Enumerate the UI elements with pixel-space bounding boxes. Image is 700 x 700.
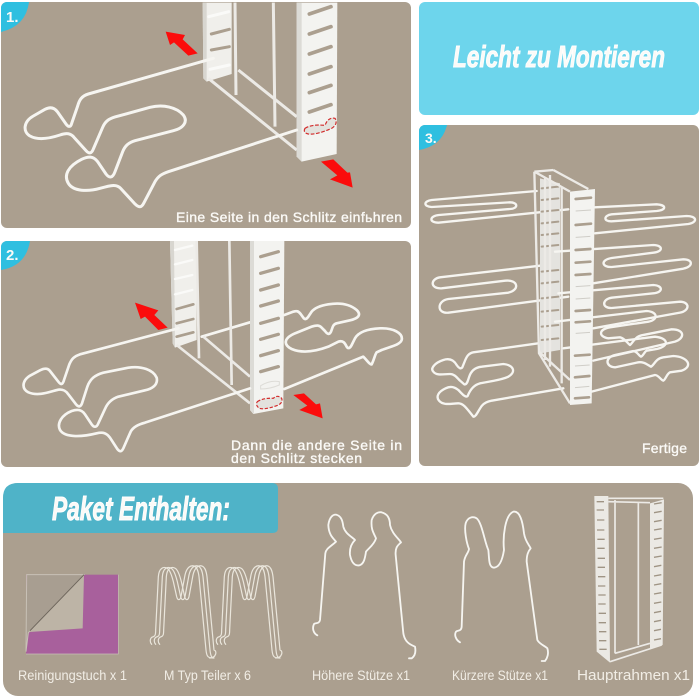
label: M dividers: M Typ Teiler x 6 bbox=[164, 668, 251, 683]
panel: step 2 bbox=[1, 241, 411, 467]
caption: step 3: Fertige bbox=[642, 440, 687, 456]
caption: step 1: Eine Seite in den Schlitz einfьhren bbox=[176, 209, 402, 225]
badge: step 2 bbox=[1, 241, 30, 270]
badge: step 1: 1. bbox=[6, 9, 19, 26]
caption: step 2 bbox=[231, 440, 402, 464]
panel: step 1 bbox=[1, 2, 411, 228]
icon: shorter support bbox=[455, 512, 548, 661]
label: main frame: Hauptrahmen x1 bbox=[577, 668, 690, 684]
icon: taller support bbox=[313, 512, 415, 658]
icon: left wires bbox=[425, 191, 568, 417]
heading banner: Paket Enthalten: bbox=[52, 490, 230, 527]
icon: wire divider step 1 bbox=[25, 58, 297, 207]
icon: cleaning cloth bbox=[26, 575, 118, 654]
arrow: red left bbox=[135, 303, 168, 330]
caption: step 2: den Schlitz stecken bbox=[231, 450, 362, 466]
badge: step 1 bbox=[1, 2, 29, 32]
icon: front post bbox=[570, 189, 595, 405]
arrow: red right bbox=[293, 393, 323, 418]
label: shorter support: Kürzere Stütze x1 bbox=[452, 668, 548, 683]
arrow: red right bbox=[321, 159, 353, 188]
panel: package contents bbox=[3, 483, 693, 696]
icon: right wires bbox=[555, 204, 695, 392]
icon: rack frame step 2 bbox=[170, 241, 284, 414]
panel: title banner bbox=[419, 2, 699, 115]
icon: main frame bbox=[594, 496, 664, 663]
label: taller support: Höhere Stütze x1 bbox=[312, 668, 410, 683]
badge: step 3 bbox=[419, 125, 447, 150]
icon: wire divider step 2 bbox=[24, 328, 250, 451]
caption: step 2: Dann die andere Seite in bbox=[231, 437, 402, 453]
icon: rack frame step 1 bbox=[203, 3, 337, 162]
arrow: red left bbox=[166, 32, 198, 56]
heading banner bbox=[3, 483, 278, 533]
label: cloth: Reinigungstuch x 1 bbox=[18, 668, 127, 683]
icon: M dividers bbox=[150, 566, 282, 658]
icon: rear wire step 2 bbox=[202, 304, 402, 389]
badge: step 2: 2. bbox=[6, 247, 19, 264]
badge: step 3: 3. bbox=[425, 130, 437, 146]
panel: step 3 bbox=[419, 125, 699, 466]
icon: rack frame step 3 bbox=[534, 170, 588, 403]
